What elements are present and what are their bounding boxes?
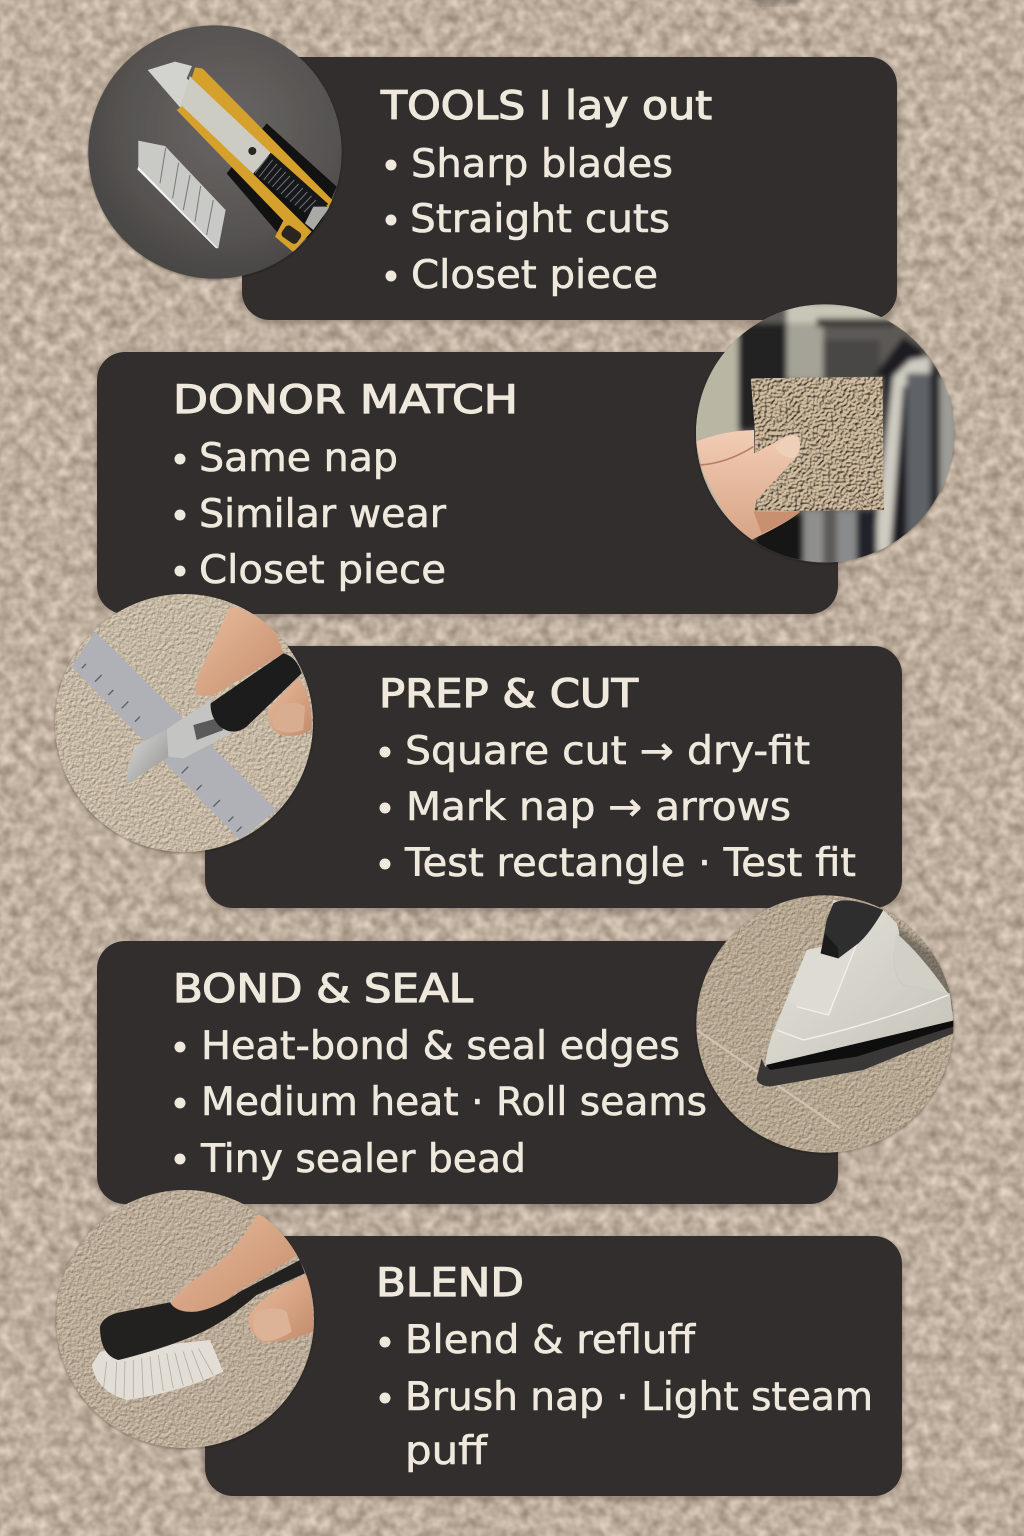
bullet list: prep and cut: Test rectangle · Test fit: [404, 841, 856, 886]
bullet list: prep and cut: [380, 729, 856, 886]
panel: bond and seal: [97, 895, 957, 1204]
heading: blend: BLEND: [376, 1261, 524, 1306]
bullet list: bond and seal: Heat-bond & seal edges: [201, 1024, 680, 1069]
heading: bond and seal: BOND & SEAL: [173, 967, 473, 1012]
icon: utility knife and spare blade: [88, 25, 342, 279]
panel card: prep and cut: [205, 646, 902, 908]
bullet list: donor match: [174, 436, 447, 593]
bullet list: blend: Blend & refluff: [405, 1318, 696, 1363]
bullet list: tools: [386, 142, 673, 298]
panel card: donor match: [97, 352, 838, 614]
panel: tools: [88, 25, 897, 320]
panel card: tools: [242, 57, 897, 320]
bullet list: donor match: Similar wear: [199, 492, 447, 537]
bullet list: bond and seal: Medium heat · Roll seams: [201, 1080, 707, 1125]
bullet list: blend: puff: [405, 1429, 488, 1474]
heading: donor match: DONOR MATCH: [173, 378, 518, 423]
bullet list: blend: Brush nap · Light steam: [405, 1375, 873, 1420]
bullet list: bond and seal: Tiny sealer bead: [200, 1137, 526, 1182]
bullet list: donor match: Same nap: [199, 436, 398, 481]
panel card: bond and seal: [97, 941, 838, 1204]
panel card: blend: [205, 1236, 902, 1496]
icon: knife cutting along ruler: [55, 594, 313, 852]
bullet list: prep and cut: Square cut → dry-fit: [405, 729, 810, 774]
icon: brush fluffing carpet: [56, 1190, 314, 1448]
bullet list: tools: Sharp blades: [411, 142, 673, 187]
bullet list: bond and seal: [174, 1024, 707, 1182]
panel: blend: [56, 1190, 902, 1496]
bullet list: prep and cut: Mark nap → arrows: [406, 785, 791, 830]
bullet list: blend: [380, 1318, 873, 1474]
heading: tools: TOOLS I lay out: [380, 84, 712, 129]
icon: hand holding carpet swatch in closet: [690, 300, 963, 567]
icon: iron on carpet seam: [696, 895, 957, 1153]
panel: prep and cut: [55, 594, 902, 908]
cropped shadow at top edge: [745, 0, 805, 5]
panel: donor match: [97, 300, 963, 614]
bullet list: donor match: Closet piece: [199, 548, 446, 593]
bullet list: tools: Closet piece: [411, 253, 658, 298]
bullet list: tools: Straight cuts: [410, 197, 670, 242]
heading: prep and cut: PREP & CUT: [379, 672, 638, 717]
